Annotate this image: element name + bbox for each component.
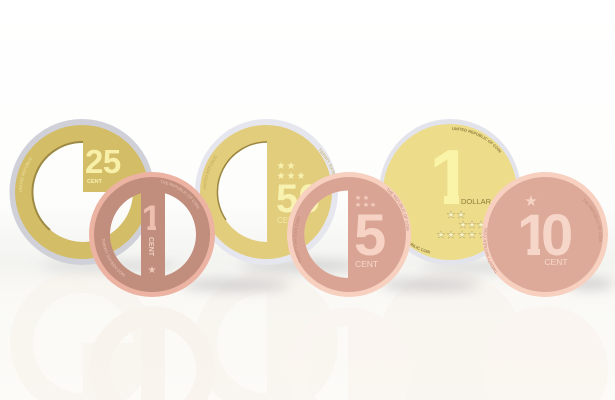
gold face bbox=[200, 125, 332, 259]
stars: ★ bbox=[468, 230, 477, 241]
floor shadows bbox=[40, 261, 614, 290]
ring inscription: THE REPUBLIC OF COIN bbox=[386, 188, 409, 230]
copper rim bbox=[89, 172, 215, 297]
coin: 50 cent bbox=[195, 119, 338, 265]
copper face bbox=[94, 177, 210, 292]
coin: 5 cent bbox=[287, 172, 411, 297]
denomination: 5 bbox=[354, 203, 386, 268]
denomination: 1 bbox=[429, 133, 473, 221]
coin: 1 dollar bbox=[380, 119, 520, 262]
stars: ★ bbox=[363, 194, 369, 202]
coin: 1 dollar: DOLLAR bbox=[461, 197, 492, 206]
copper face bbox=[292, 177, 406, 292]
denomination: 0 bbox=[541, 203, 573, 268]
coin: 5 cent: TWENTY SIXTEEN COIN bbox=[294, 216, 302, 263]
stars: ★ bbox=[479, 230, 488, 241]
stars: ★ bbox=[468, 220, 477, 231]
stars: ★ bbox=[477, 220, 486, 231]
stars: ★ bbox=[458, 230, 467, 241]
stars: ★ bbox=[277, 171, 286, 182]
denomination: 1 bbox=[142, 199, 161, 238]
coin: 25 cent: CENT bbox=[87, 179, 103, 185]
coin: 5 cent: CENT bbox=[355, 259, 378, 269]
stars: ★ bbox=[287, 171, 296, 182]
stars: ★ bbox=[355, 194, 361, 202]
stars: ★ bbox=[457, 210, 466, 221]
copper rim bbox=[287, 172, 411, 297]
stars: ★ bbox=[287, 161, 296, 172]
gold face bbox=[383, 124, 517, 260]
coin: 25 cent bbox=[10, 119, 152, 265]
gold face bbox=[15, 125, 149, 259]
denomination: 50 bbox=[276, 177, 320, 221]
coin: 50 cent: TWENTY SIXTEEN COIN bbox=[318, 148, 335, 174]
coin: 1 dollar: THE REPUBLIC COIN bbox=[410, 242, 430, 254]
stars: ★ bbox=[447, 210, 456, 221]
copper face bbox=[487, 177, 603, 292]
stars: ★ bbox=[370, 201, 376, 209]
coin: 1 cent: TWENTY SIXTEEN COIN bbox=[102, 238, 126, 276]
ring inscription: UNITED REPUBLIC OF COIN bbox=[452, 127, 502, 153]
denomination bbox=[521, 214, 571, 256]
coin: 10 cent: TWENTY SIXTEEN COIN bbox=[484, 228, 498, 274]
coin: 1 cent bbox=[89, 172, 215, 297]
coin: 10 cent bbox=[482, 172, 608, 297]
denomination: 25 bbox=[85, 143, 121, 180]
silver rim bbox=[379, 119, 521, 265]
stars: ★ bbox=[459, 220, 468, 231]
stars: ★ bbox=[447, 230, 456, 241]
silver rim bbox=[9, 119, 154, 265]
ring inscription: UNITED REPUBLIC bbox=[19, 156, 32, 192]
floor reflection of coins bbox=[10, 271, 608, 400]
stars: ★ bbox=[297, 171, 306, 182]
infographic: coin set bbox=[0, 119, 615, 400]
coin: 10 cent: CENT bbox=[544, 257, 568, 267]
ring inscription: THE REPUBLIC OF COIN bbox=[582, 198, 602, 242]
ring inscription: UNITED REPUBLIC bbox=[203, 155, 217, 190]
copper rim bbox=[482, 172, 608, 297]
silver rim bbox=[195, 119, 338, 265]
star: ★ bbox=[524, 193, 538, 210]
star: ★ bbox=[148, 265, 157, 276]
stars: ★ bbox=[355, 201, 361, 209]
coin: 1 cent: CENT bbox=[147, 237, 154, 257]
ring inscription: THE REPUBLIC OF COIN bbox=[160, 180, 200, 209]
stars: ★ bbox=[363, 201, 369, 209]
denomination: 1 bbox=[517, 203, 549, 268]
stars: ★ bbox=[437, 230, 446, 241]
coin: 50 cent: CENT bbox=[277, 216, 299, 225]
stars: ★ bbox=[277, 161, 286, 172]
